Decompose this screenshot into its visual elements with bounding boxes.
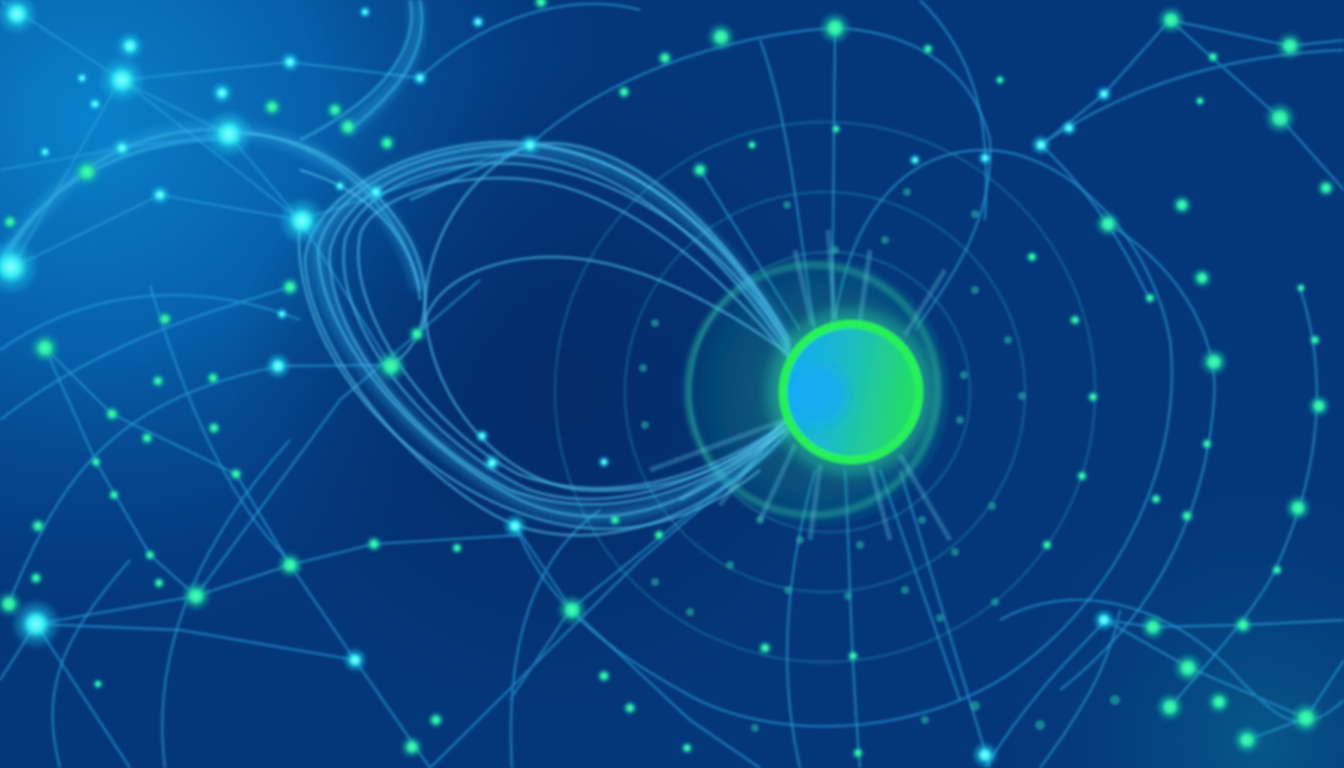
converging rays — [650, 230, 950, 540]
top-left arcs — [0, 0, 530, 290]
dim ring dots — [639, 188, 1120, 732]
concentric rings — [555, 122, 1095, 662]
central orb — [767, 308, 935, 476]
central glow halo — [680, 257, 950, 527]
bundle glow underlay — [0, 0, 790, 516]
large loop bundle — [228, 134, 790, 535]
